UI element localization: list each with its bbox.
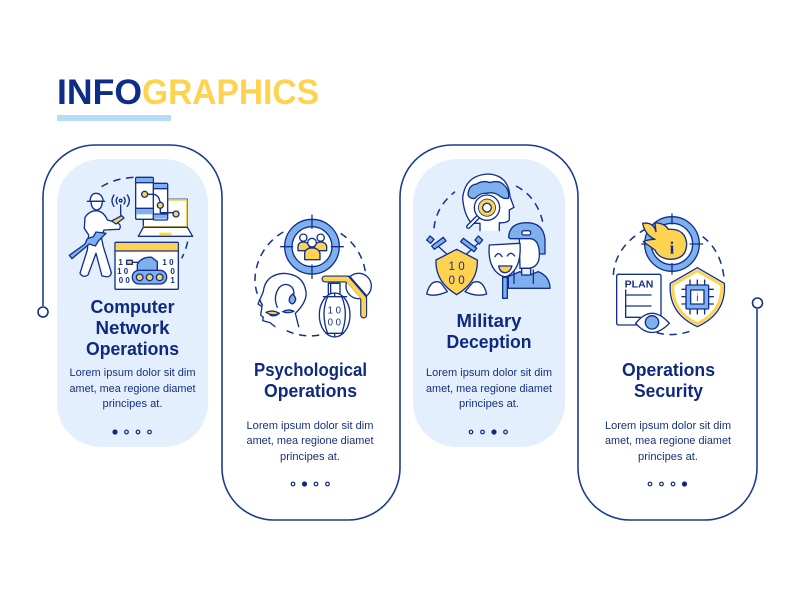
body text 1 — [70, 367, 196, 410]
heading: psychological operations — [254, 360, 367, 401]
icon: soldier, devices and tank: 1 0 — [117, 267, 129, 276]
icon: soldier, devices and tank: 1 — [170, 276, 175, 285]
icon: target group, head and grenade — [255, 215, 371, 337]
icon: target group, head and grenade: 0 0 — [328, 317, 341, 328]
heading: operations security: Security — [634, 381, 703, 401]
body text 4 — [605, 420, 731, 463]
icon: soldier, devices and tank — [69, 177, 193, 289]
heading: computer network operations: Operations — [86, 339, 179, 359]
title underline — [57, 115, 171, 121]
heading: computer network operations: Computer — [90, 297, 174, 317]
heading: psychological operations: Psychological — [254, 360, 367, 380]
progress dots 2 — [291, 482, 329, 486]
progress dots 4 — [648, 482, 686, 486]
icon: info target, plan and shield — [613, 214, 724, 335]
icon: info target, plan and shield: i — [696, 293, 698, 304]
body text 4: principes at. — [638, 451, 698, 463]
icon: soldier, devices and tank: 0 — [170, 267, 175, 276]
heading: military deception — [446, 311, 532, 352]
body text 2 — [246, 420, 374, 463]
body text 1: principes at. — [102, 398, 162, 410]
panel: blue card 3 — [413, 159, 565, 447]
end node — [752, 298, 762, 308]
icon: soldier, devices and tank: 0 0 — [119, 276, 130, 285]
heading: military deception: Military — [456, 311, 522, 331]
title: GRAPHICS — [142, 73, 319, 112]
icon: brain head, shield and mask: 0 0 — [449, 274, 465, 287]
heading: military deception: Deception — [446, 332, 532, 352]
icon: soldier, devices and tank: 1 — [118, 258, 123, 267]
connecting outline — [43, 145, 757, 520]
body text 3: principes at. — [459, 398, 519, 410]
body text 4: Lorem ipsum dolor sit dim — [605, 420, 731, 432]
title — [57, 73, 319, 112]
body text 2: amet, mea regione diamet — [246, 435, 374, 447]
heading: operations security: Operations — [622, 360, 715, 380]
body text 2: Lorem ipsum dolor sit dim — [246, 420, 374, 432]
icon: info target, plan and shield: PLAN — [625, 279, 653, 290]
body text 1: Lorem ipsum dolor sit dim — [70, 367, 196, 379]
heading: computer network operations — [86, 297, 179, 359]
progress dots 3 — [469, 430, 507, 434]
title: INFO — [57, 73, 142, 112]
body text 1: amet, mea regione diamet — [70, 383, 196, 395]
heading: computer network operations: Network — [96, 318, 171, 338]
heading: psychological operations: Operations — [264, 381, 357, 401]
body text 3 — [426, 367, 552, 410]
icon: soldier, devices and tank: 1 0 — [162, 258, 174, 267]
panel: blue card 1 — [57, 159, 208, 447]
body text 3: Lorem ipsum dolor sit dim — [426, 367, 552, 379]
icon: target group, head and grenade: 1 0 — [328, 305, 341, 316]
start node — [38, 307, 48, 317]
heading: operations security — [622, 360, 715, 401]
body text 2: principes at. — [280, 451, 340, 463]
icon: brain head, shield and mask: 1 0 — [449, 260, 465, 273]
body text 4: amet, mea regione diamet — [605, 435, 731, 447]
body text 3: amet, mea regione diamet — [426, 383, 552, 395]
icon: brain head, shield and mask — [427, 174, 550, 298]
icon: info target, plan and shield: i — [670, 238, 675, 257]
progress dots 1 — [113, 430, 151, 434]
